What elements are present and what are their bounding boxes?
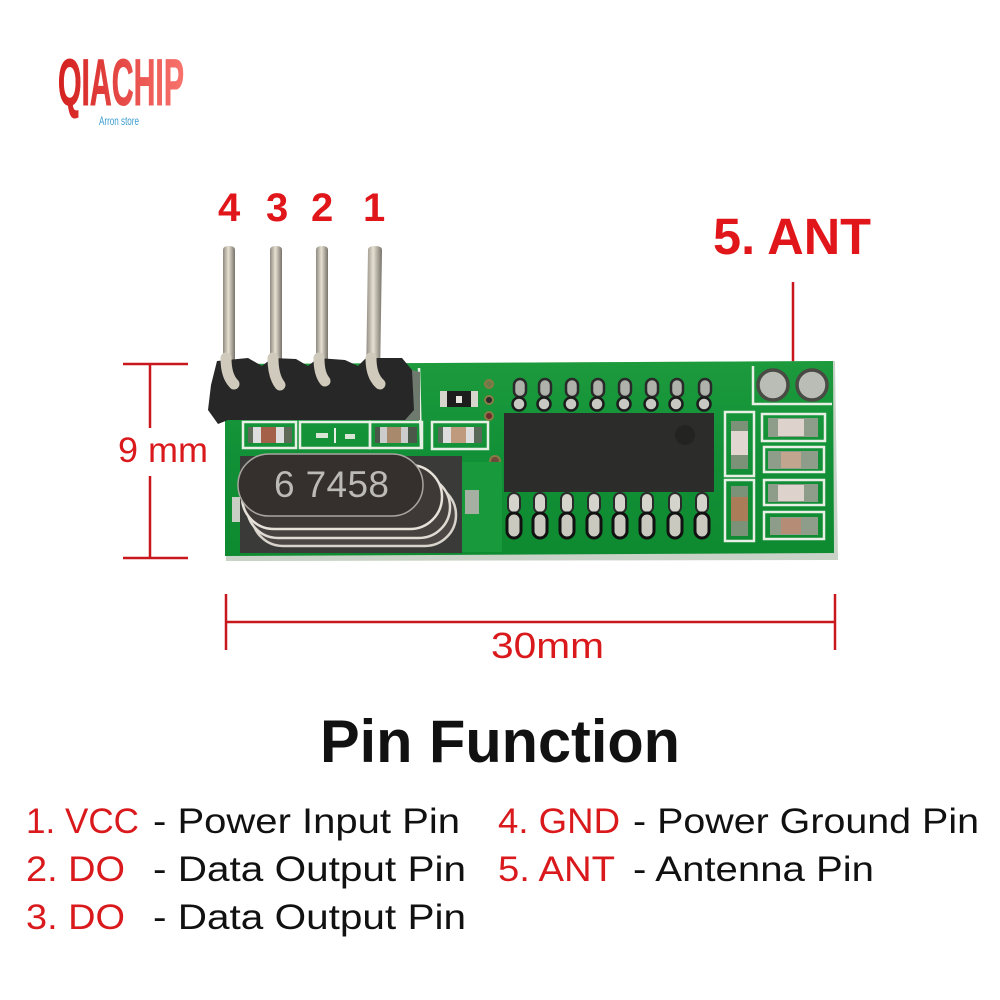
pin 3: 3. DO <box>26 898 125 937</box>
header housing <box>208 358 414 424</box>
pin number labels <box>218 186 385 230</box>
crystal dark pad <box>240 456 462 553</box>
pin number labels: 1 <box>363 186 385 230</box>
pin 4: 4. GND <box>498 802 620 841</box>
housing shadow <box>400 368 420 420</box>
pin 1 <box>26 802 460 841</box>
antenna leader line <box>792 282 794 376</box>
pin 2 <box>26 850 466 889</box>
pin number labels: 3 <box>266 186 288 230</box>
30mm label: 30mm <box>491 625 604 666</box>
antenna label: 5. ANT <box>713 208 871 265</box>
ic bottom pins <box>507 493 709 538</box>
pin 1: 1. VCC <box>26 802 139 841</box>
pin 3 <box>26 898 466 937</box>
silkscreen outlines <box>243 366 832 541</box>
antenna pads <box>758 370 827 400</box>
pin 5: 5. ANT <box>498 850 615 889</box>
circuit board module <box>208 246 838 561</box>
ic top pins <box>512 379 711 410</box>
pin 5 <box>498 850 874 889</box>
pin 3: - Data Output Pin <box>153 898 466 937</box>
crystal oscillator <box>238 454 456 546</box>
pin 4: - Power Ground Pin <box>633 802 979 841</box>
pin bends <box>226 358 380 385</box>
right smd components <box>731 418 818 536</box>
logo subtitle: Arron store <box>99 114 139 128</box>
small smd parts <box>232 380 500 522</box>
pin 4 <box>498 802 979 841</box>
ic chip body <box>504 413 714 492</box>
crystal marking: 6 7458 <box>274 464 389 505</box>
pin number labels: 2 <box>311 186 333 230</box>
pin 1: - Power Input Pin <box>153 802 460 841</box>
text: QIACHIP <box>58 45 184 119</box>
pin 5: - Antenna Pin <box>633 850 874 889</box>
board edge <box>225 361 838 561</box>
9mm label: 9 mm <box>118 431 208 470</box>
heading: Pin Function <box>320 708 680 775</box>
header pins <box>223 246 382 380</box>
green pcb <box>225 361 834 556</box>
logo <box>58 45 184 128</box>
pin 2: 2. DO <box>26 850 125 889</box>
pin number labels: 4 <box>218 186 241 230</box>
pin 2: - Data Output Pin <box>153 850 466 889</box>
pin list <box>26 802 979 937</box>
